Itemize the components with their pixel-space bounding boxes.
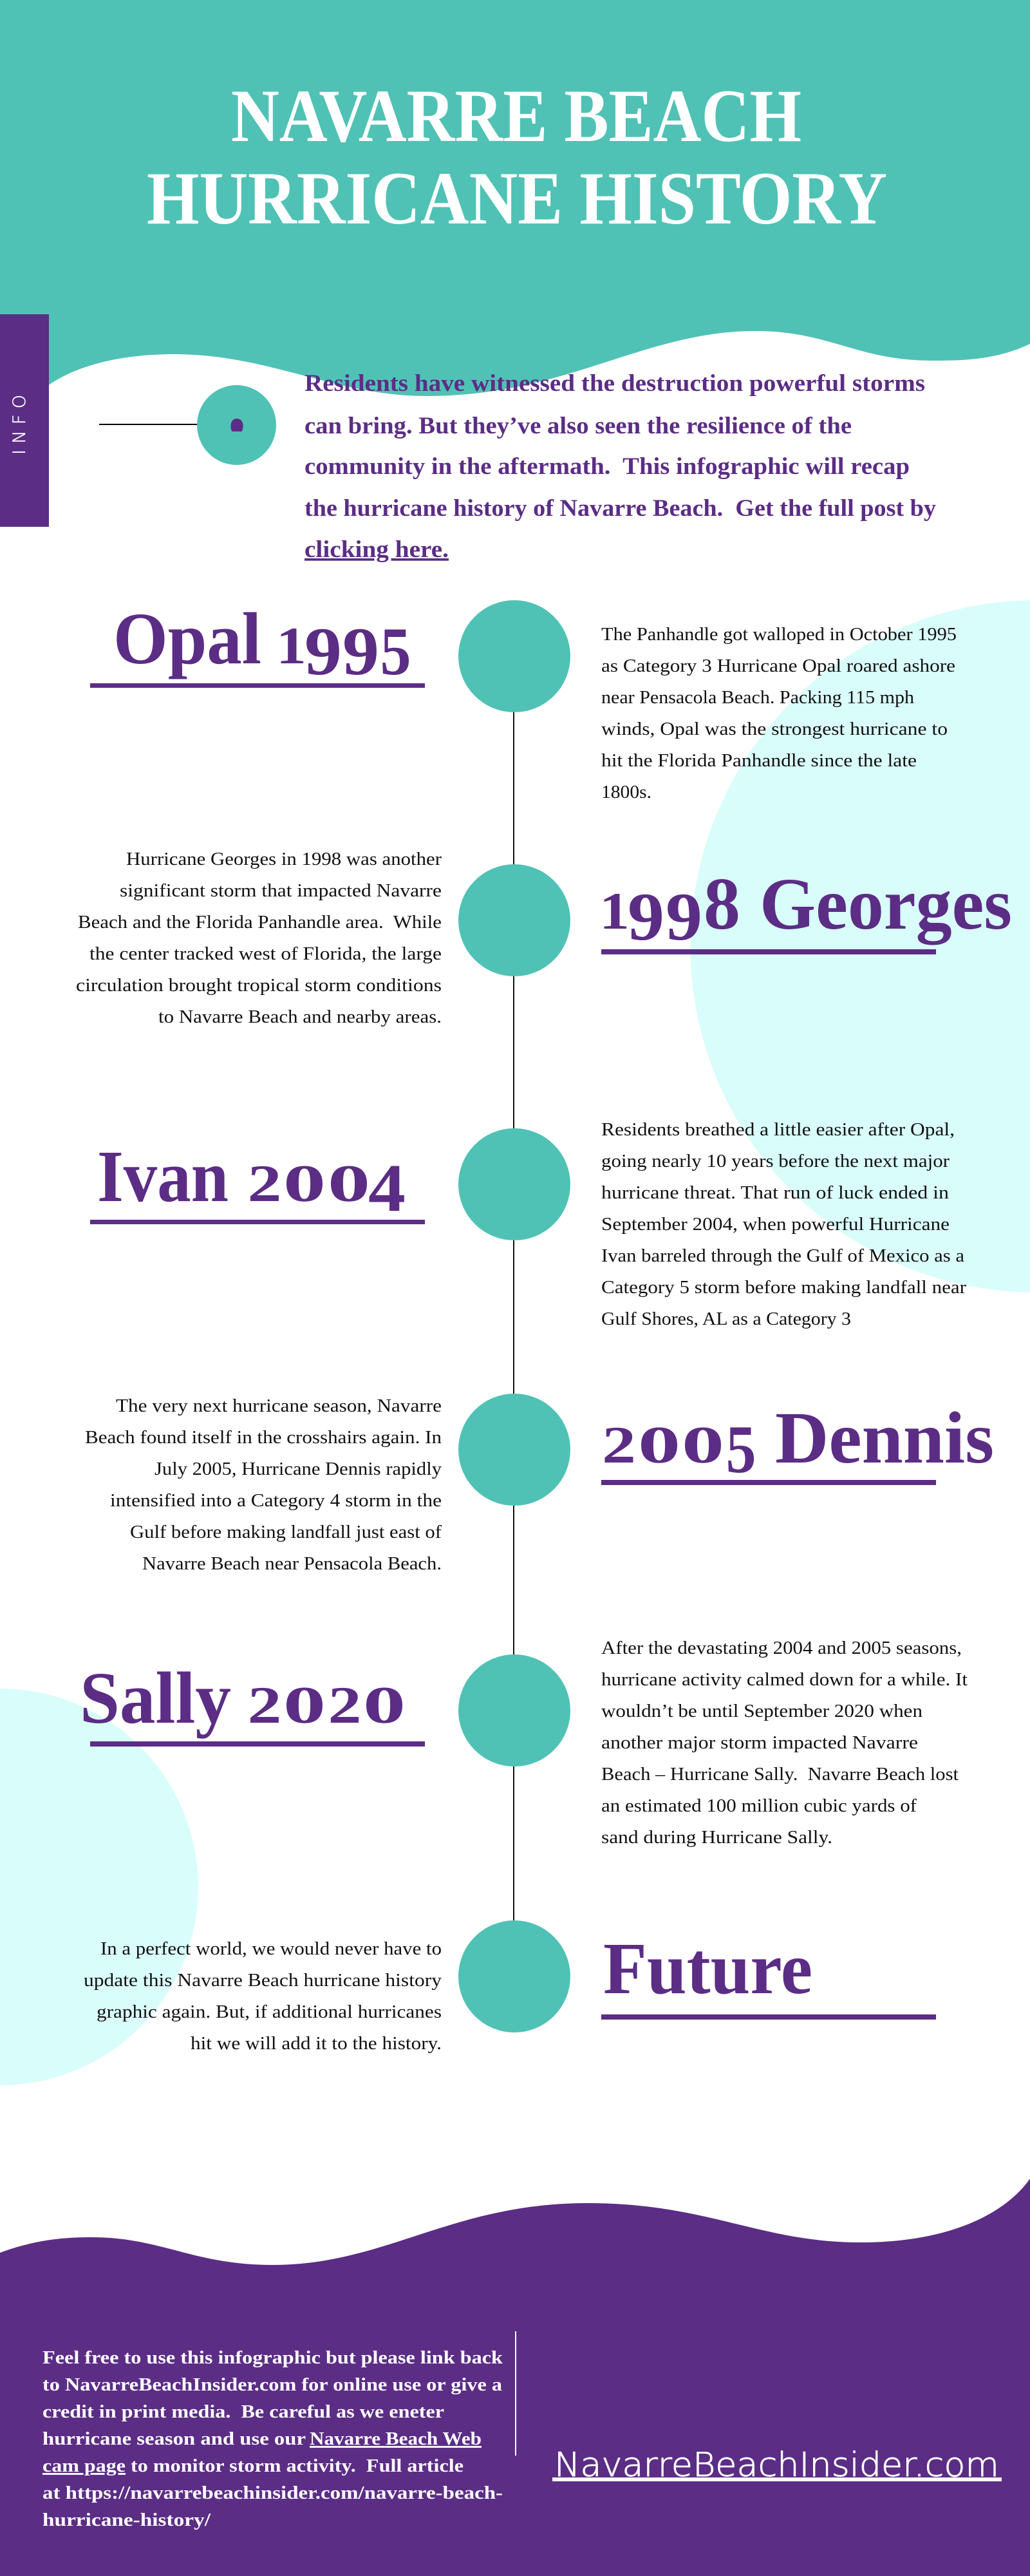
intro text: community in the aftermath. This infographic will recap: [304, 453, 910, 480]
heading: 1998 Georges: 9: [628, 879, 664, 954]
heading: 2005 Dennis: 0: [638, 1416, 680, 1474]
heading: 1998 Georges: Georges: [760, 863, 1012, 945]
text: Georges: [76, 849, 442, 1027]
intro text: Residents have witnessed the destruction powerful storms: [304, 370, 925, 397]
text: Opal: as Category 3 Hurricane Opal roared ashore: [601, 656, 955, 676]
text: Sally: After the devastating 2004 and 2005 seasons,: [601, 1638, 962, 1658]
heading: Ivan 2004: 0: [283, 1154, 326, 1213]
text: Sally: sand during Hurricane Sally.: [601, 1827, 832, 1848]
heading: Ivan 2004: 2: [247, 1154, 282, 1213]
decorative pale circle: left: [0, 1689, 198, 2085]
heading: 2005 Dennis: [601, 1397, 994, 1487]
footer text: hurricane season and use our: [42, 2429, 306, 2449]
text: Opal: near Pensacola Beach. Packing 115 mph: [601, 687, 915, 708]
text: Ivan: hurricane threat. That run of luck ended in: [601, 1182, 950, 1203]
text: Sally: another major storm impacted Navarre: [601, 1732, 918, 1753]
heading: 1998 Georges: 1: [599, 882, 630, 940]
heading: 2005 Dennis: Dennis: [775, 1397, 994, 1479]
decorative pale circle: right: [690, 600, 1030, 1293]
footer website link: NavarreBeachInsider.com: [554, 2446, 999, 2485]
heading: Opal 1995: 9: [342, 614, 379, 689]
heading: Future: Future: [603, 1927, 812, 2009]
heading: Sally 2020: [80, 1657, 425, 1747]
text: Opal: [601, 624, 957, 802]
text: Sally: [601, 1638, 968, 1848]
footer text: to monitor storm activity. Full article: [131, 2456, 464, 2476]
heading: Opal 1995: 1: [276, 616, 306, 675]
text: Ivan: Ivan barreled through the Gulf of Mexico as a: [601, 1245, 964, 1266]
text: Dennis: [85, 1396, 442, 1574]
heading: Ivan 2004: 0: [328, 1154, 370, 1213]
circle: 1995: [458, 600, 570, 712]
title: NAVARRE BEACH: [231, 75, 801, 158]
footer purple wave: [0, 2179, 1030, 2576]
text: Georges: the center tracked west of Florida, the large: [89, 943, 442, 964]
footer text: to NavarreBeachInsider.com for online use or give a: [42, 2374, 503, 2395]
text: Opal: The Panhandle got walloped in October 1995: [601, 624, 957, 645]
intro text: can bring. But they’ve also seen the resilience of the: [304, 413, 852, 439]
circle: future: [458, 1920, 570, 2032]
footer text: Feel free to use this infographic but please link back: [42, 2347, 503, 2368]
info tab: INFO: [10, 395, 30, 455]
title: [147, 75, 887, 240]
heading: Ivan 2004: 4: [368, 1150, 406, 1226]
heading: 1998 Georges: [599, 863, 1012, 954]
text: Future: graphic again. But, if additional hurricanes: [97, 2002, 442, 2022]
text: Opal: winds, Opal was the strongest hurricane to: [601, 719, 948, 739]
circle: 1998: [458, 864, 570, 976]
heading: Sally 2020: 0: [363, 1676, 406, 1734]
intro text: the hurricane history of Navarre Beach. Get the full post by: [304, 495, 937, 522]
text: Ivan: going nearly 10 years before the next major: [601, 1151, 950, 1171]
circle: 2004: [458, 1128, 570, 1240]
heading: Sally 2020: 2: [328, 1676, 362, 1734]
footer text: cam page: [42, 2456, 126, 2476]
heading: 1998 Georges: 9: [666, 879, 702, 954]
text: Sally: an estimated 100 million cubic yards of: [601, 1795, 917, 1816]
text: Future: update this Navarre Beach hurricane history: [84, 1970, 442, 1991]
header teal wave: [0, 0, 1030, 425]
text: Ivan: September 2004, when powerful Hurricane: [601, 1214, 950, 1235]
heading: Sally 2020: Sally: [80, 1657, 231, 1739]
timeline line: [513, 656, 514, 1976]
heading: 2005 Dennis: 5: [726, 1412, 756, 1487]
footer text: [42, 2347, 503, 2530]
text: Future: hit we will add it to the history.: [191, 2033, 442, 2054]
text: Dennis: Navarre Beach near Pensacola Beach.: [142, 1553, 442, 1574]
text: Dennis: July 2005, Hurricane Dennis rapidly: [154, 1459, 442, 1479]
text: Future: [84, 1938, 442, 2054]
heading: 2005 Dennis: 2: [602, 1416, 636, 1474]
text: Ivan: Residents breathed a little easier after Opal,: [601, 1119, 955, 1140]
text: Dennis: The very next hurricane season, Navarre: [116, 1396, 442, 1416]
text: Georges: significant storm that impacted Navarre: [120, 880, 442, 901]
heading: Sally 2020: 0: [283, 1676, 326, 1734]
heading: Future: [601, 1927, 936, 2020]
text: Dennis: Beach found itself in the crosshairs again. In: [85, 1427, 442, 1448]
footer text: hurricane-history/: [42, 2510, 211, 2530]
heading: Ivan 2004: Ivan: [97, 1135, 229, 1217]
text: Opal: hit the Florida Panhandle since the late: [601, 750, 917, 771]
heading: Opal 1995: [90, 598, 425, 689]
heading: Sally 2020: 2: [247, 1676, 282, 1734]
intro text: clicking here.: [304, 536, 449, 563]
text: Dennis: Gulf before making landfall just east of: [130, 1522, 442, 1542]
heading: Opal 1995: Opal: [113, 598, 261, 679]
text: Future: In a perfect world, we would never have to: [100, 1938, 442, 1959]
text: Opal: 1800s.: [601, 782, 651, 802]
circle: 2005: [458, 1394, 570, 1506]
footer text: Navarre Beach Web: [310, 2429, 482, 2449]
info tab: [0, 314, 49, 527]
footer text: credit in print media. Be careful as we eneter: [42, 2401, 444, 2422]
intro marker: line and circle: [99, 385, 276, 465]
text: Georges: Beach and the Florida Panhandle area. While: [78, 912, 442, 933]
text: Sally: Beach – Hurricane Sally. Navarre Beach lost: [601, 1764, 959, 1785]
title: HURRICANE HISTORY: [147, 157, 887, 240]
text: Ivan: Gulf Shores, AL as a Category 3: [601, 1309, 851, 1329]
text: Georges: circulation brought tropical storm conditions: [76, 975, 442, 996]
text: Georges: to Navarre Beach and nearby areas.: [158, 1007, 442, 1027]
heading: Opal 1995: 9: [304, 614, 342, 689]
heading: Opal 1995: 5: [380, 614, 411, 689]
footer divider: [515, 2331, 516, 2456]
text: Ivan: Category 5 storm before making landfall near: [601, 1277, 966, 1298]
text: Sally: hurricane activity calmed down for a while. It: [601, 1669, 968, 1690]
intro text: [304, 370, 937, 563]
circle: 2020: [458, 1654, 570, 1766]
text: Sally: wouldn’t be until September 2020 when: [601, 1701, 923, 1721]
heading: 2005 Dennis: 0: [682, 1416, 724, 1474]
text: Dennis: intensified into a Category 4 storm in the: [110, 1490, 442, 1511]
heading: Ivan 2004: [90, 1135, 425, 1226]
text: Ivan: [601, 1119, 966, 1329]
footer text: at https://navarrebeachinsider.com/navarre-beach-: [42, 2483, 503, 2503]
text: Georges: Hurricane Georges in 1998 was another: [126, 849, 442, 869]
heading: 1998 Georges: 8: [704, 863, 740, 945]
